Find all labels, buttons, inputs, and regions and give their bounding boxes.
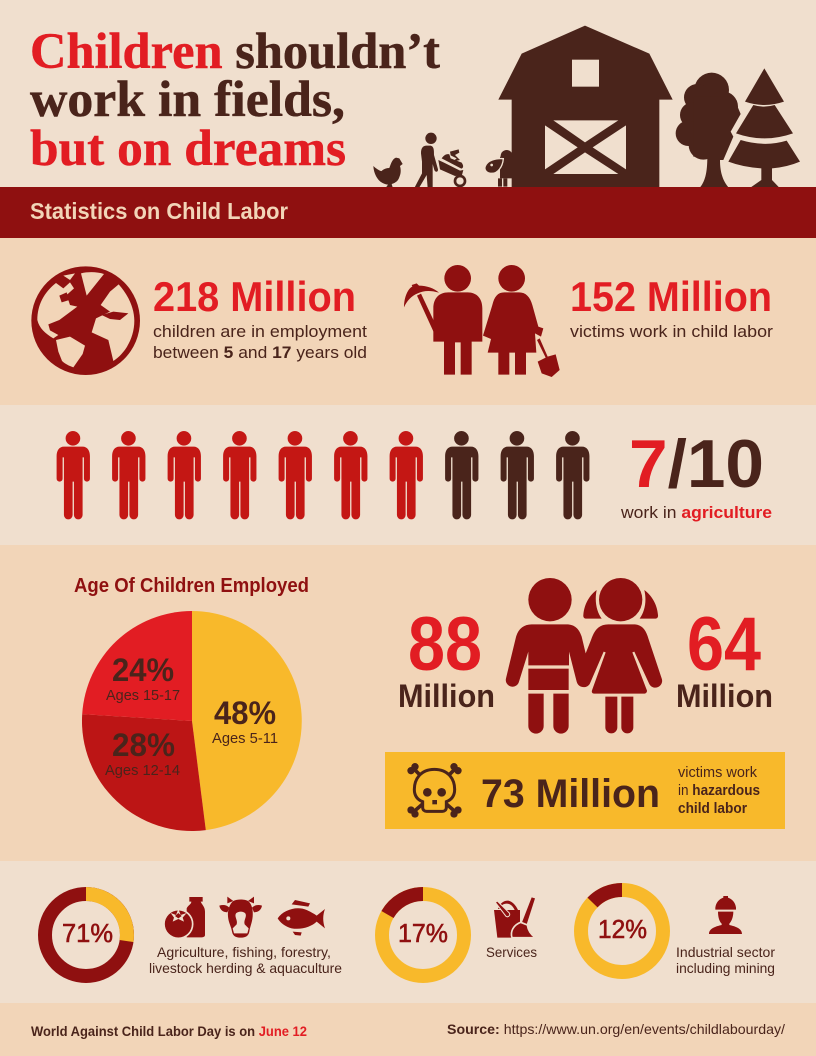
stat: 7/10: 7/10 bbox=[629, 426, 764, 502]
stat: 88 million boys bbox=[398, 602, 495, 714]
stat: 88 million boys: Million bbox=[398, 678, 495, 714]
text: industrial caption: including mining bbox=[676, 960, 775, 976]
donut: 17 percent: 17% bbox=[398, 918, 448, 948]
icon: pine tree bbox=[728, 68, 800, 188]
stat: 218 million: children are in employment bbox=[153, 322, 367, 341]
donut: 12 percent bbox=[581, 890, 663, 972]
stat: 218 million: 218 Million bbox=[153, 273, 356, 320]
callout: hazardous labor: 73 Million bbox=[481, 772, 660, 816]
donut: 71 percent: 71% bbox=[62, 918, 113, 948]
stat: 88 million boys: 88 bbox=[408, 602, 482, 687]
donut: 12 percent: 12% bbox=[598, 914, 647, 944]
icon: child workers with pickaxe and shovel bbox=[404, 265, 560, 377]
stat: 64 million girls: Million bbox=[676, 678, 773, 714]
panel: sectors bbox=[0, 861, 816, 1003]
text: hazardous description bbox=[678, 764, 760, 817]
pie chart: 24% bbox=[112, 652, 174, 688]
text: source: Source: https://www.un.org/en/events/childlabourday/ bbox=[447, 1021, 785, 1037]
icon: round tree bbox=[676, 73, 741, 188]
text: hazardous description: child labor bbox=[678, 800, 747, 817]
icon: globe bbox=[31, 266, 140, 375]
text: industrial caption bbox=[676, 944, 775, 976]
title: but on dreams bbox=[30, 121, 346, 177]
pie chart: Ages 5-11 bbox=[212, 730, 278, 747]
donut: 17 percent bbox=[382, 894, 464, 976]
icon: miner with helmet bbox=[709, 896, 742, 934]
pie chart bbox=[82, 611, 302, 831]
text: agriculture caption: livestock herding & aquaculture bbox=[149, 960, 342, 976]
icon: cow bbox=[219, 897, 262, 938]
stat: 218 million bbox=[153, 273, 367, 362]
text: industrial caption: Industrial sector bbox=[676, 944, 775, 960]
pie chart: Ages 12-14 bbox=[105, 762, 180, 779]
banner: statistics heading bbox=[0, 187, 816, 238]
stat: 64 million girls: 64 bbox=[687, 602, 761, 687]
illustration: farm scene bbox=[373, 26, 800, 188]
heading: age of children employed: Age Of Children Employed bbox=[74, 575, 309, 597]
title bbox=[30, 24, 440, 177]
panel: employment totals bbox=[0, 238, 816, 405]
icon: fish bbox=[278, 900, 325, 936]
stat: 152 million: 152 Million bbox=[570, 273, 772, 320]
panel: age and gender bbox=[0, 545, 816, 861]
icon: tomato and bottle bbox=[164, 897, 205, 938]
stat: 64 million girls bbox=[676, 602, 773, 714]
icon: child with wheelbarrow bbox=[415, 133, 465, 188]
pie chart: 28% bbox=[112, 727, 175, 763]
stat: 7/10 bbox=[620, 426, 772, 522]
icon: boy and girl bbox=[506, 576, 662, 734]
icon: sheep bbox=[485, 150, 513, 187]
text: agriculture caption bbox=[149, 944, 342, 976]
banner: statistics heading: Statistics on Child Labor bbox=[30, 198, 288, 224]
panel: header background bbox=[0, 0, 816, 187]
donut: 71 percent bbox=[45, 894, 127, 976]
title: Children shouldn’t bbox=[30, 24, 440, 80]
stat: 152 million: victims work in child labor bbox=[570, 322, 773, 341]
text: agriculture caption: Agriculture, fishing, forestry, bbox=[157, 944, 331, 960]
icon: skull and crossbones bbox=[407, 763, 462, 818]
panel: seven of ten bbox=[0, 405, 816, 545]
text: services caption: Services bbox=[486, 944, 537, 960]
text: hazardous description: in hazardous bbox=[678, 782, 760, 799]
pictogram: ten figures bbox=[57, 431, 589, 519]
panel: footer bbox=[0, 1003, 816, 1056]
text: hazardous description: victims work bbox=[678, 764, 757, 781]
pie chart: Ages 15-17 bbox=[106, 687, 180, 704]
stat: 218 million: between 5 and 17 years old bbox=[153, 343, 367, 362]
stat: 7/10: work in agriculture bbox=[620, 503, 772, 522]
pie chart: 48% bbox=[214, 695, 276, 731]
icon: bucket and broom bbox=[494, 897, 535, 938]
title: work in fields, bbox=[30, 72, 345, 128]
text: labor day note: World Against Child Labor Day is on June 12 bbox=[31, 1023, 307, 1039]
icon: barn bbox=[498, 26, 673, 188]
icon: hen bbox=[373, 158, 403, 187]
callout: hazardous labor bbox=[385, 752, 785, 829]
stat: 152 million bbox=[570, 273, 773, 341]
